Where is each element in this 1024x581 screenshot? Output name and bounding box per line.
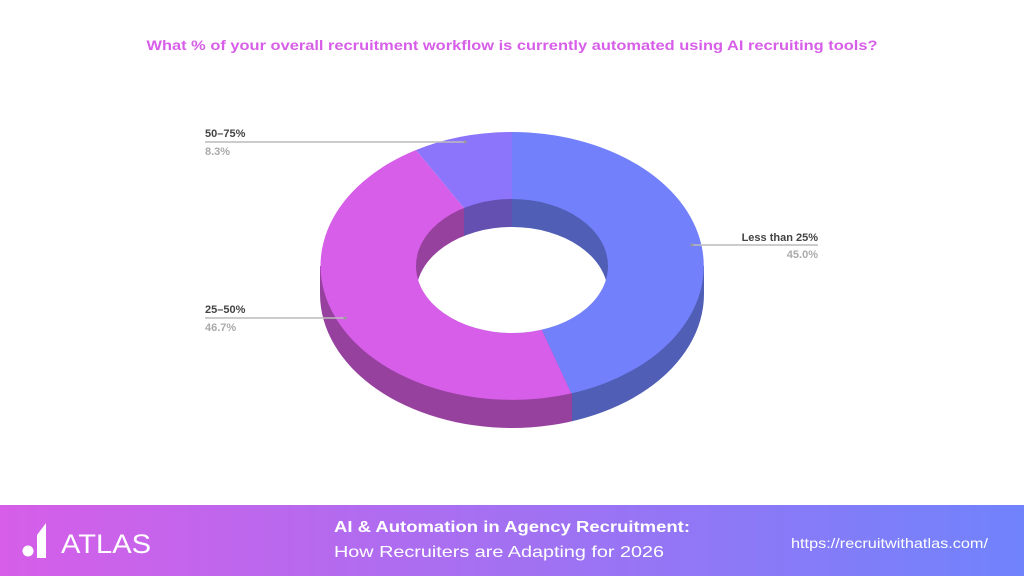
icon: atlas logo: [22, 523, 46, 558]
label: less than 25%: Less than 25%: [742, 232, 818, 244]
footer title: AI & Automation in Agency Recruitment:: [334, 519, 690, 536]
logo text: ATLAS: [61, 529, 151, 559]
donut chart: [320, 132, 704, 428]
slice: 50-75%: [416, 132, 512, 266]
footer band: [0, 505, 1024, 576]
label: 50-75%: [205, 128, 466, 158]
label: 50-75%: 50–75%: [205, 128, 246, 140]
label: less than 25%: [690, 232, 818, 261]
url: https://recruitwithatlas.com/: [791, 535, 988, 551]
label: 50-75%: 8.3%: [205, 146, 230, 158]
slice: less than 25%: [512, 132, 704, 393]
label: 25-50%: 46.7%: [205, 322, 236, 334]
label: less than 25%: 45.0%: [787, 249, 818, 261]
label: 25-50%: 25–50%: [205, 304, 246, 316]
label: 25-50%: [205, 304, 346, 334]
footer subtitle: How Recruiters are Adapting for 2026: [334, 544, 664, 561]
title: What % of your overall recruitment workflow is currently automated using AI recruiting tools?: [146, 37, 878, 53]
slice: 25-50%: [321, 150, 571, 400]
